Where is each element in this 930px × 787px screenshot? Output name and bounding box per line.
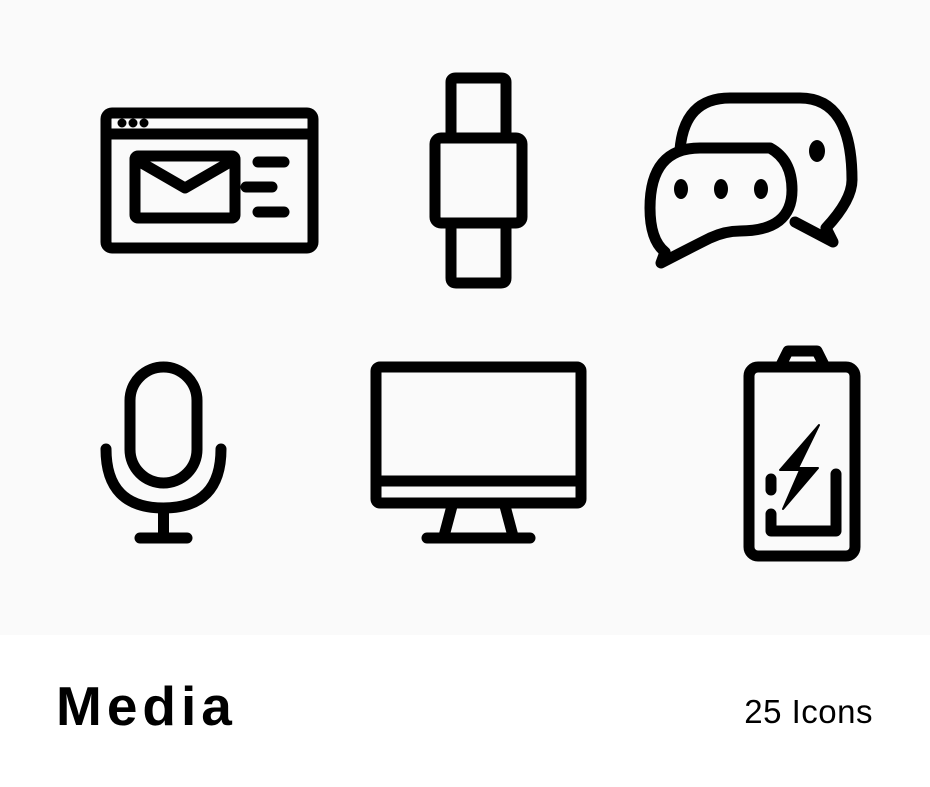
icon: desktop monitor [376, 367, 581, 538]
icon: battery charging [749, 351, 855, 556]
icon: smartwatch [435, 78, 522, 283]
icon: microphone [106, 367, 221, 538]
icon: email window [106, 113, 313, 248]
icon count: 25 Icons [744, 693, 873, 730]
title: Media [56, 675, 237, 737]
icon: chat bubbles [650, 98, 852, 263]
